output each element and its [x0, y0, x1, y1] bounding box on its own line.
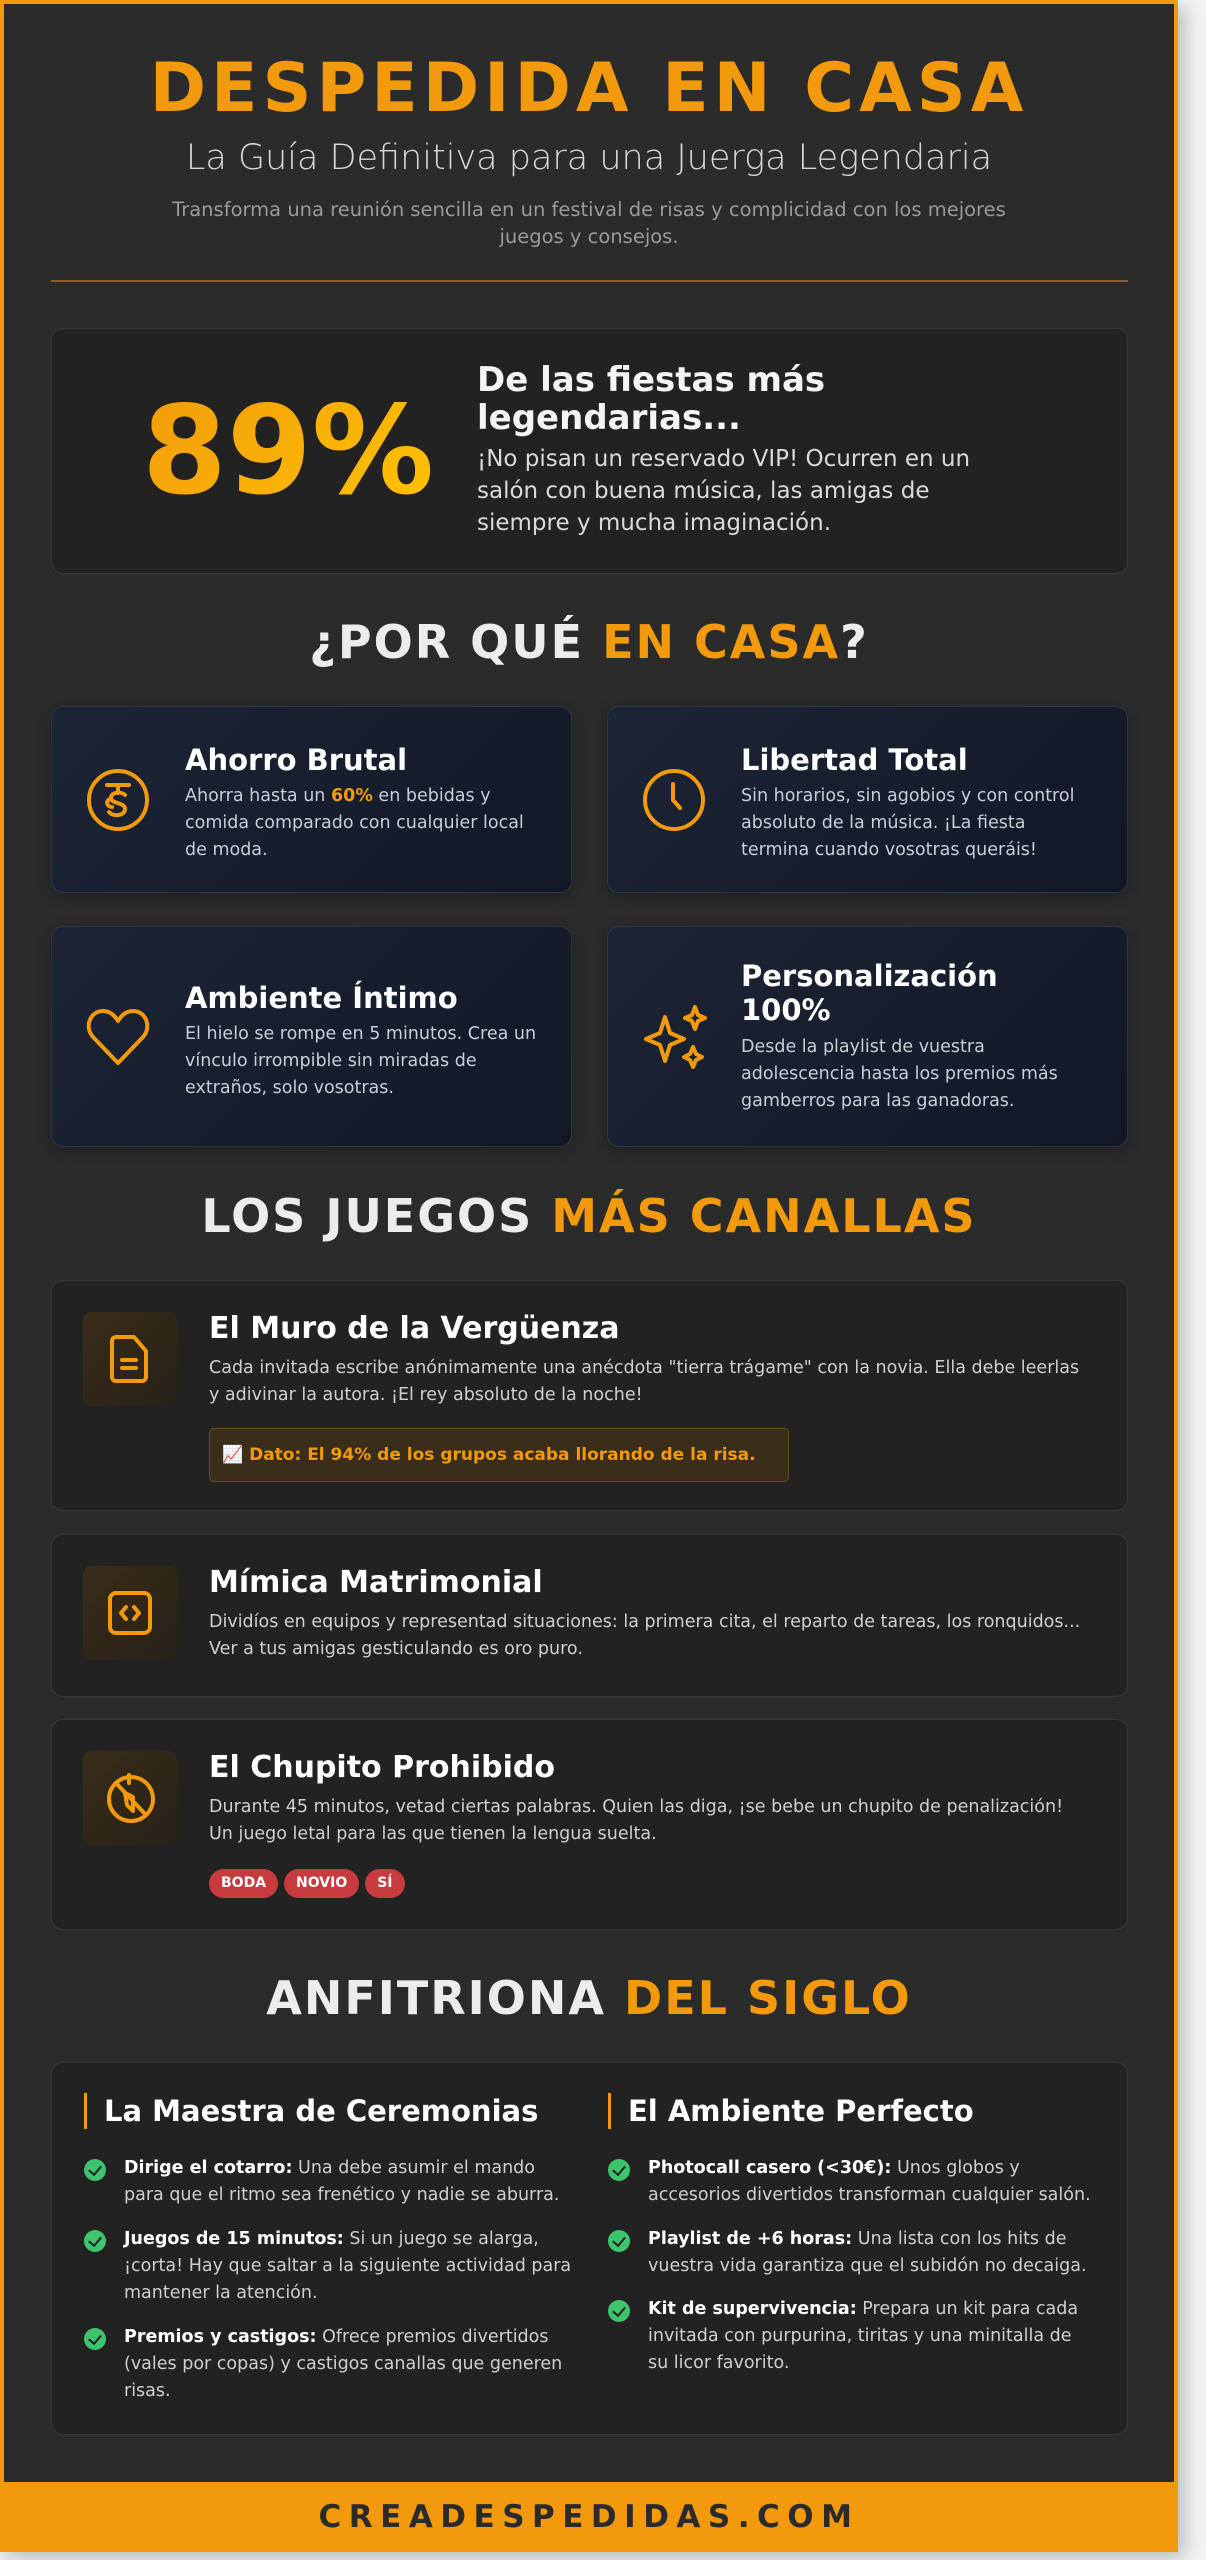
text: Sin horarios, sin agobios y con control absoluto de la música. ¡La fiesta termina cuando vosotras queráis!: [741, 786, 1074, 860]
footer: CREADESPEDIDAS.COM: [319, 2499, 859, 2535]
game card: mímica: [51, 1534, 1128, 1697]
title: Mímica Matrimonial: [209, 1565, 543, 1600]
text: Dividíos en equipos y representad situaciones: la primera cita, el reparto de tareas, los ronquidos... Ver a tus amigas gesticulando es oro puro.: [209, 1612, 1080, 1659]
intro text: Transforma una reunión sencilla en un festival de risas y complicidad con los mejores juegos y consejos.: [172, 198, 1006, 248]
stat text: ¡No pisan un reservado VIP! Ocurren en un salón con buena música, las amigas de siempre y mucha imaginación.: [477, 446, 970, 536]
list 1: [84, 2158, 571, 2401]
card: personalización: [607, 926, 1128, 1147]
text: Durante 45 minutos, vetad ciertas palabras. Quien las diga, ¡se bebe un chupito de penalización! Un juego letal para las que tienen la lengua suelta.: [209, 1797, 1063, 1844]
game card: muro: [51, 1280, 1128, 1511]
card: ahorro: [51, 706, 572, 893]
column heading 1: La Maestra de Ceremonias: [104, 2094, 538, 2128]
list 2: [608, 2158, 1091, 2373]
list 1: Premios y castigos: Ofrece premios divertidos (vales por copas) y castigos canallas que generen risas.: [124, 2327, 562, 2401]
heading: anfitriona: ANFITRIONA DEL SIGLO: [266, 1971, 912, 2025]
icon: money: [87, 769, 149, 831]
icon: forbidden: [83, 1751, 177, 1845]
icon: document: [83, 1312, 177, 1406]
panel: stat 89%: [51, 328, 1128, 574]
icon: sparkles: [644, 1004, 708, 1070]
subtitle: La Guía Definitiva para una Juerga Legendaria: [186, 138, 992, 178]
list 1: Juegos de 15 minutos: Si un juego se alarga, ¡corta! Hay que saltar a la siguiente actividad para mantener la atención.: [124, 2229, 571, 2303]
icon: heart: [86, 1009, 150, 1066]
title: Ambiente Íntimo: [185, 981, 458, 1015]
footer: [0, 2482, 1178, 2552]
card: ambiente: [51, 926, 572, 1147]
title: Ahorro Brutal: [185, 743, 407, 777]
title: Libertad Total: [741, 743, 968, 777]
big number: 89%: [142, 380, 434, 522]
list 2: Kit de supervivencia: Prepara un kit para cada invitada con purpurina, tiritas y una minitalla de su licor favorito.: [648, 2299, 1078, 2373]
panel: tips: [51, 2062, 1128, 2435]
title: El Muro de la Vergüenza: [209, 1311, 619, 1346]
game card: chupito: [51, 1719, 1128, 1930]
tags: SÍ: [377, 1875, 393, 1891]
tags: NOVIO: [296, 1875, 347, 1891]
text: El hielo se rompe en 5 minutos. Crea un vínculo irrompible sin miradas de extraños, solo vosotras.: [185, 1024, 536, 1098]
tags: [209, 1869, 405, 1898]
column heading 2: El Ambiente Perfecto: [628, 2094, 974, 2128]
heading: juegos: LOS JUEGOS MÁS CANALLAS: [201, 1189, 977, 1243]
stat heading: De las fiestas más legendarias...: [477, 360, 825, 438]
text: Desde la playlist de vuestra adolescencia hasta los premios más gamberros para las ganadoras.: [741, 1037, 1058, 1111]
text: Cada invitada escribe anónimamente una anécdota "tierra trágame" con la novia. Ella debe leerlas y adivinar la autora. ¡El rey absoluto de la noche!: [209, 1358, 1079, 1405]
list 2: Playlist de +6 horas: Una lista con los hits de vuestra vida garantiza que el subidón no decaiga.: [648, 2229, 1087, 2276]
heading: por qué en casa: ¿POR QUÉ EN CASA?: [309, 615, 869, 669]
title: El Chupito Prohibido: [209, 1750, 555, 1785]
list 2: Photocall casero (<30€): Unos globos y accesorios divertidos transforman cualquier salón.: [648, 2158, 1091, 2205]
tags: BODA: [221, 1875, 266, 1891]
card: libertad: [607, 706, 1128, 893]
text: Ahorra hasta un 60% en bebidas y comida comparado con cualquier local de moda.: [185, 786, 524, 860]
list 1: Dirige el cotarro: Una debe asumir el mando para que el ritmo sea frenético y nadie se aburra.: [124, 2158, 559, 2205]
callout: dato: [209, 1428, 789, 1482]
icon: code box: [83, 1566, 177, 1660]
callout: dato: 📈 Dato: El 94% de los grupos acaba llorando de la risa.: [222, 1445, 756, 1465]
title: DESPEDIDA EN CASA: [150, 49, 1028, 128]
icon: clock: [643, 769, 705, 831]
title: Personalización 100%: [741, 959, 998, 1027]
